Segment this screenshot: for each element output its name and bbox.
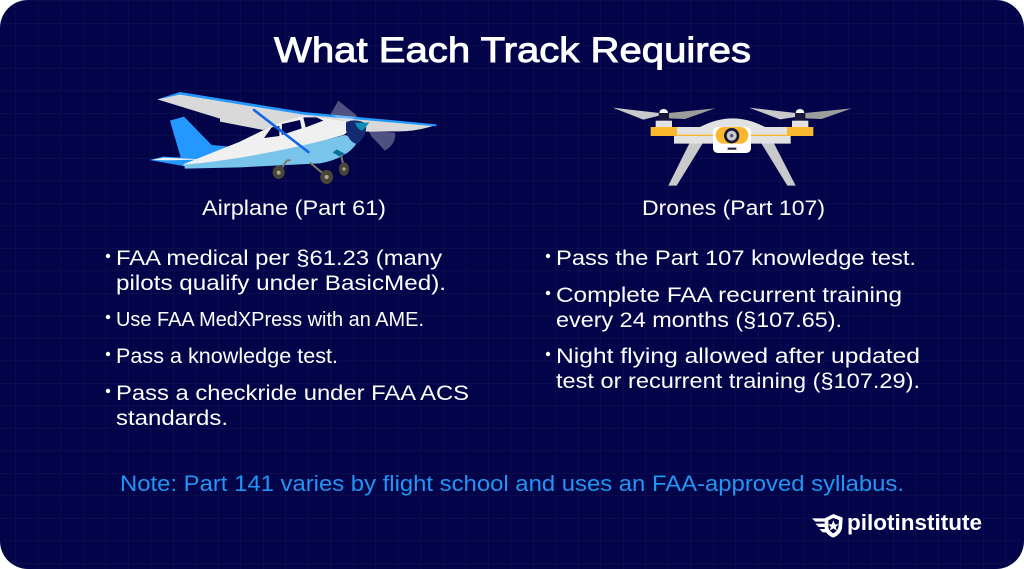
bullet: Part 107 test: Pass the Part 107 knowledge test. [556,246,916,270]
note: Note: Part 141 varies by flight school and uses an FAA-approved syllabus. [120,471,904,496]
bullet: night flying [546,344,920,393]
bullet: recurrent training: every 24 months (§107.65). [556,308,842,332]
bullet: medical [106,246,446,295]
bullet: night flying: Night flying allowed after updated [556,344,920,368]
drone requirements list [546,246,920,393]
bullet: checkride: standards. [116,406,228,430]
airplane requirements list [106,246,469,430]
logo: pilot institute [812,510,982,538]
bullet: recurrent training: Complete FAA recurrent training [556,283,902,307]
icon: drone [613,108,852,186]
bullet: medical: pilots qualify under BasicMed). [116,271,446,295]
wordmark: pilotinstitute [847,510,982,535]
title: What Each Track Requires [274,31,751,70]
bullet: recurrent training [546,283,902,332]
bullet: night flying: test or recurrent training (§107.29). [556,369,920,393]
bullet: checkride [106,381,469,430]
bullet: MedXPress: Use FAA MedXPress with an AME. [116,308,424,331]
icon: airplane [149,92,437,184]
bullet: knowledge test: Pass a knowledge test. [116,344,338,368]
bullet: checkride: Pass a checkride under FAA ACS [116,381,469,405]
column heading: drones: Drones (Part 107) [642,197,825,220]
column heading: airplane: Airplane (Part 61) [202,197,386,220]
icon: winged shield [812,514,843,538]
bullet: medical: FAA medical per §61.23 (many [116,246,442,270]
